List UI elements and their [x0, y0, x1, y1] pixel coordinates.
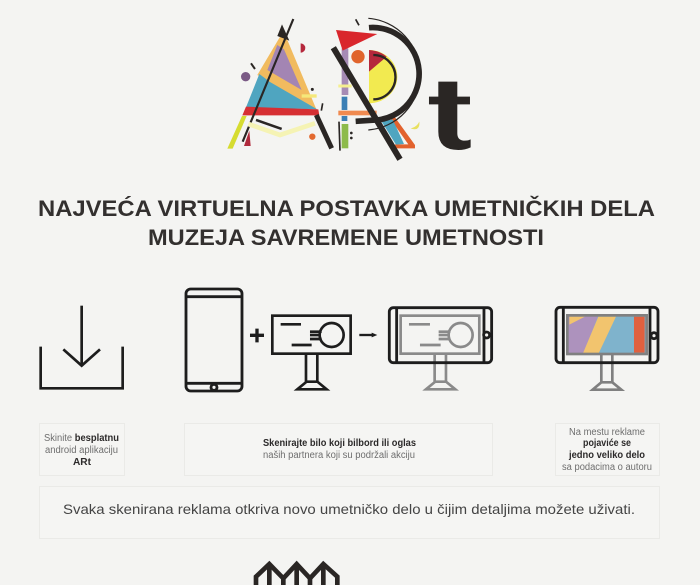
panel: scan text: naših partnera koji su podržali akciju — [263, 450, 415, 461]
panel: scan text: Skenirajte bilo koji bilbord ili oglas — [263, 438, 416, 449]
phone frame — [556, 307, 658, 363]
title: NAJVEĆA VIRTUELNA POSTAVKA UMETNIČKIH DELA — [38, 196, 655, 221]
panel: download text — [40, 424, 124, 476]
panel: download text: ARt — [73, 457, 92, 468]
panel: artwork text: pojaviće se — [583, 438, 631, 449]
panel: summary: Svaka skenirana reklama otkriva novo umetničko delo u čijim detaljima možete uživati. — [63, 501, 635, 517]
letter R — [333, 18, 420, 159]
letter t — [429, 82, 471, 150]
scan diagram — [186, 289, 492, 391]
icon: phone — [186, 289, 242, 391]
icon: download — [41, 306, 123, 388]
letter A — [227, 19, 332, 149]
logo: museum — [256, 564, 337, 585]
panel: summary — [40, 486, 660, 538]
panel: artwork text: Na mestu reklame — [569, 427, 645, 438]
panel: download text: Skinite besplatnu — [44, 433, 119, 444]
arrow — [359, 333, 377, 337]
stand — [593, 354, 621, 390]
icon: billboard — [272, 316, 351, 389]
title — [38, 196, 655, 250]
icon: plus — [250, 329, 264, 342]
icon: phone showing artwork — [556, 307, 658, 390]
panel: artwork text: sa podacima o autoru — [562, 462, 652, 473]
title: MUZEJA SAVREMENE UMETNOSTI — [148, 225, 544, 250]
panel: scan text — [184, 424, 492, 476]
panel: artwork text: jedno veliko delo — [568, 450, 645, 461]
logo: ARt — [227, 18, 471, 159]
panel: artwork text — [556, 424, 660, 476]
icon: phone scanning billboard — [389, 308, 492, 389]
artwork — [567, 315, 647, 354]
panel: download text: android aplikaciju — [45, 445, 118, 456]
